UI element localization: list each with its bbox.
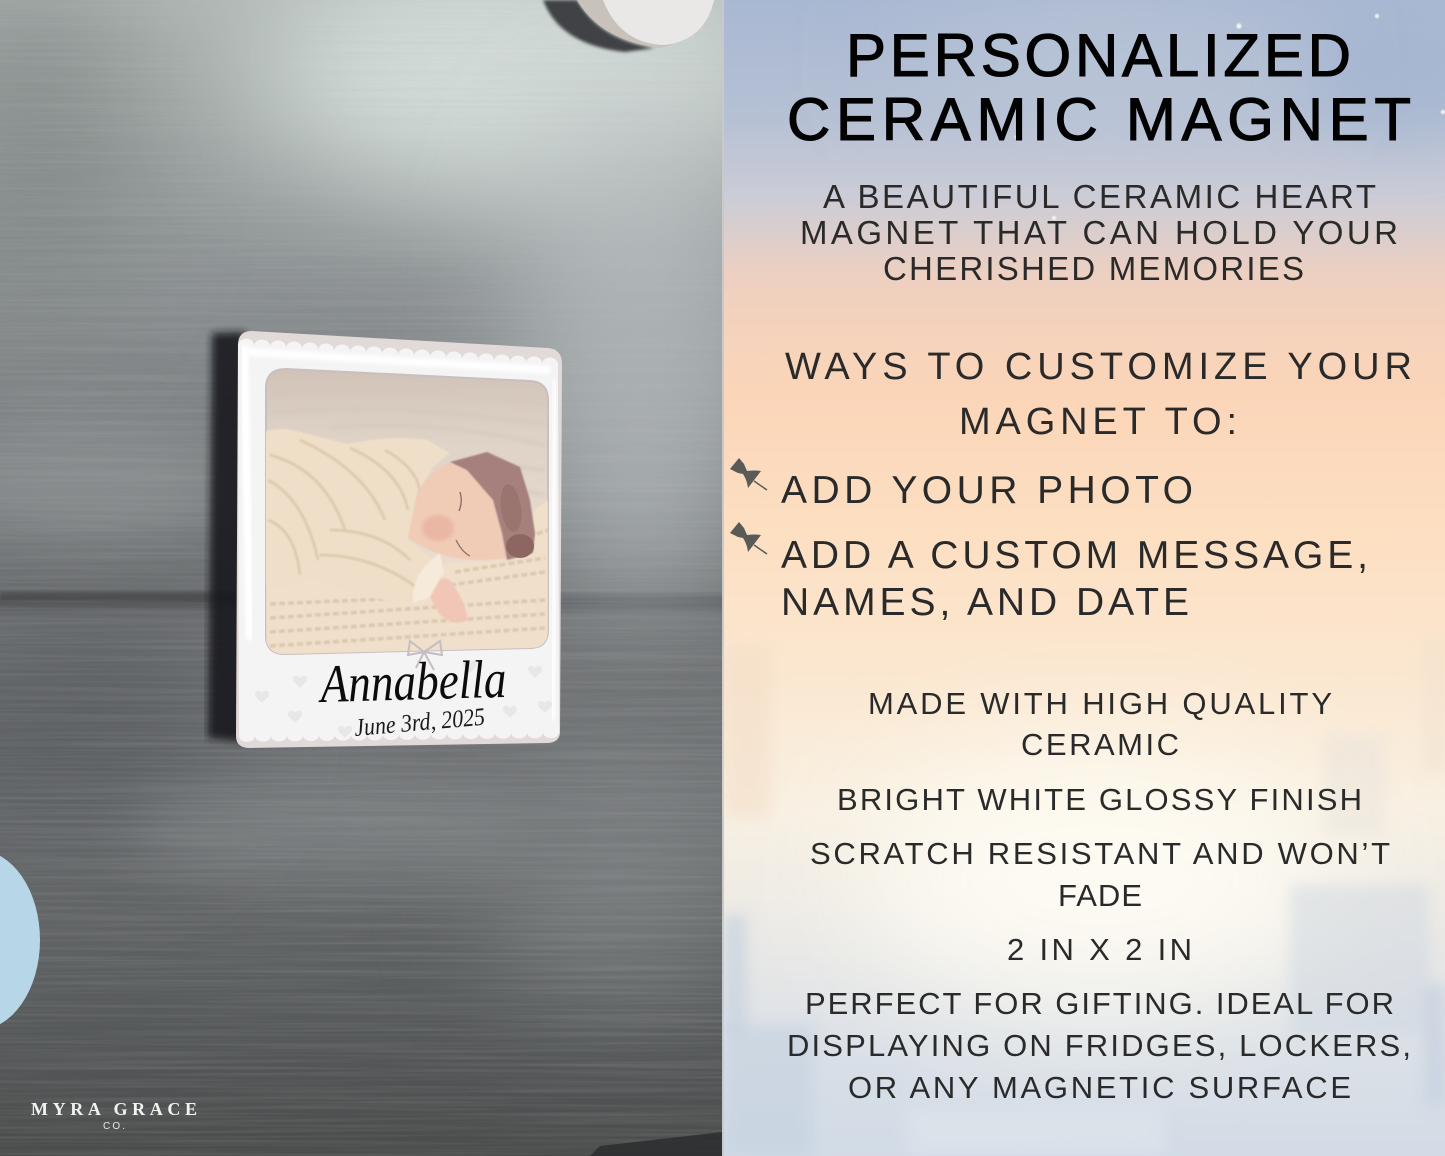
blanket [266, 500, 548, 660]
script date: June 3rd, 2025 [353, 704, 486, 742]
feature: durability: FADE [1058, 878, 1142, 913]
hearts pattern [255, 661, 552, 738]
feature: material [868, 686, 1332, 762]
feature: gifting: OR ANY MAGNETIC SURFACE [848, 1070, 1351, 1105]
feature: gifting [787, 986, 1411, 1105]
panel: ceramic photo magnet [236, 331, 562, 748]
icon: push pin 2 [730, 522, 767, 554]
panel: steel fridge photo [0, 0, 780, 1156]
feature: material: MADE WITH HIGH QUALITY [868, 686, 1332, 721]
list item: add photo: ADD YOUR PHOTO [781, 469, 1193, 512]
feature: finish: BRIGHT WHITE GLOSSY FINISH [837, 782, 1362, 817]
brand logo: CO. [103, 1121, 125, 1132]
list item: add message: ADD A CUSTOM MESSAGE, [781, 534, 1368, 577]
icon: blue round magnet left [0, 850, 40, 1030]
feature: gifting: PERFECT FOR GIFTING. IDEAL FOR [805, 986, 1394, 1021]
subtitle: CHERISHED MEMORIES [883, 250, 1304, 287]
title: PERSONALIZED [846, 22, 1351, 89]
heading: ways to customize [785, 346, 1412, 443]
feature: durability: SCRATCH RESISTANT AND WON’T [810, 836, 1390, 871]
magnet shadow [208, 332, 245, 742]
feature: durability [810, 836, 1390, 913]
baby photo [262, 369, 548, 660]
icon: white round magnet top [543, 0, 714, 52]
title [787, 22, 1411, 153]
feature: gifting: DISPLAYING ON FRIDGES, LOCKERS, [787, 1028, 1411, 1063]
feature: size: 2 IN X 2 IN [1007, 932, 1192, 967]
baby sweater [262, 429, 450, 603]
brand logo: MYRA GRACE [31, 1099, 197, 1119]
title: CERAMIC MAGNET [787, 86, 1411, 153]
feature: material: CERAMIC [1021, 727, 1179, 762]
heading: ways to customize: WAYS TO CUSTOMIZE YOUR [785, 346, 1412, 388]
icon: push pin 1 [730, 458, 767, 490]
baby hand [427, 578, 468, 623]
subtitle [800, 178, 1398, 287]
icon: bow [408, 641, 442, 670]
subtitle: A BEAUTIFUL CERAMIC HEART [823, 178, 1376, 215]
headband [450, 452, 535, 560]
list item: add message: NAMES, AND DATE [781, 581, 1189, 624]
baby face [408, 462, 506, 560]
brand logo [31, 1103, 196, 1129]
script name: Annabella [317, 649, 507, 714]
list item: add message [781, 534, 1368, 624]
heading: ways to customize: MAGNET TO: [959, 401, 1237, 443]
panel: sunset sky background [722, 0, 1445, 1156]
subtitle: MAGNET THAT CAN HOLD YOUR [800, 214, 1398, 251]
